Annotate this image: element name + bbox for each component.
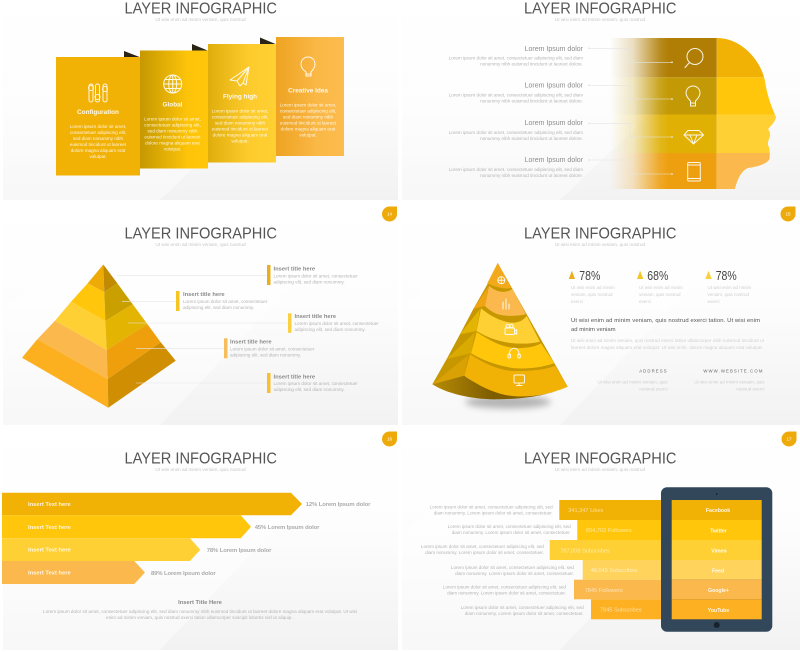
card: configuration: consectetuer adipiscing elit, [70,130,126,135]
stat 1: veniam, quis nostrud [571,292,613,297]
callout 1: adipiscing elit, sed diam nonummy. [274,280,345,284]
row 2 bar: 654,702 Followers [586,528,632,534]
callout 2: Lorem ipsum dolor sit amet, consectetuer [183,299,268,304]
card: creative idea: sed diam nonummy nibh [283,114,333,120]
item 3: diamond: nonummy nibh euismod tincidunt ut laoreet dolore. [480,136,583,141]
callout 4: Insert title here [230,340,272,346]
website: Ut wisi enim ad minim veniam, quis [694,380,765,384]
card: creative idea [260,37,344,156]
callout 1 [267,265,358,285]
arrow 1: 12% Lorem Ipsum dolor [306,502,371,508]
card: configuration: Lorem ipsum dolor sit amet, [70,124,126,129]
row 6 bar [461,599,661,619]
page number [382,206,397,222]
row 2 bar: Lorem ipsum dolor sit amet, consectetuer adipiscing elit, sed [448,524,571,529]
card: global: dolore magna aliquam erat [145,140,201,146]
insert title text block: Insert Title Here [178,600,223,606]
item 2: bulb: Lorem Ipsum dolor [525,82,584,90]
stat 3: exerci [708,299,720,304]
panel: tablet slide [402,428,800,650]
row 1 bar: 341,347 Likes [568,508,603,514]
item 2: bulb [449,82,700,106]
card: flying high: Flying high [223,94,257,100]
address: ADDRESS [639,368,668,374]
callout 3: Lorem ipsum dolor sit amet, consectetuer [294,321,379,326]
card: creative idea: consectetuer adipiscing elit, [280,108,336,114]
callout 4: adipiscing elit, sed diam nonummy. [230,352,301,358]
arrow 1: Insert Text here [28,502,72,508]
card: creative idea: volutpat. [299,132,317,138]
card: configuration: Configuration [77,109,119,116]
stat 3: Ut wisi enim ad minim [708,285,752,290]
website: nostrud exerci [736,386,764,392]
subtitle: Ut wisi enim ad minim veniam, quis nostrud [155,242,246,247]
callout 3: Insert title here [294,314,337,320]
title: LAYER INFOGRAPHIC [124,0,277,18]
text block body: Ut wisi enim ad minim veniam, quis nostrud exerci tation ullamcorper nibh euismod tincidunt ut [571,338,765,343]
panel: 3D cone slide [402,203,800,425]
stat 1: exerci [571,299,583,304]
callout 3 [288,313,379,333]
tier 1 [487,263,512,289]
tablet: Google+ [708,588,729,594]
card: global: consectetuer adipiscing elit, [144,122,201,128]
arrow 3: 78% Lorem Ipsum dolor [207,548,272,554]
callout 5: adipiscing elit, sed diam nonummy. [274,387,345,392]
head silhouette with colour bands [610,38,787,189]
card: configuration: euismod tincidunt ut laoreet [70,142,127,147]
tier 2 [473,287,488,309]
card: global: euismod tincidunt ut laoreet [144,134,201,140]
insert title text block: Lorem ipsum dolor sit amet, consectetuer adipiscing elit, sed diam nonummy nibh euismod tincidunt ut laoreet dolore magna aliquam erat volutpat. Ut wisi [43,609,357,614]
card: flying high [192,44,276,162]
item 1: search [449,46,703,68]
item 2: bulb: nonummy nibh euismod tincidunt ut laoreet dolore. [480,98,583,104]
page number [782,432,796,447]
row 3 bar: 787,009 Subscribes [560,548,610,554]
subtitle: Ut wisi enim ad minim veniam, quis nostrud [555,17,645,22]
arrow 2: 45% Lorem Ipsum dolor [255,525,320,531]
address [597,368,668,392]
row 4 bar: diam nonummy. Lorem ipsum dolor sit amet, consectetuer. [455,571,574,576]
tier 5 [432,355,468,384]
arrow 3 [2,538,272,561]
page number: 16 [387,436,392,442]
item 4: tablet: nonummy nibh euismod tincidunt ut laoreet dolore. [480,173,583,178]
cone chart [432,263,568,408]
item 1: search: nonummy nibh euismod tincidunt ut laoreet dolore. [480,62,583,66]
arrow 4 [2,561,216,584]
row 6 bar: Lorem ipsum dolor sit amet, consectetuer adipiscing elit, sed [461,605,584,610]
stat 1: 78% [579,269,600,283]
page number [781,206,796,222]
row 5 bar: diam nonummy. Lorem ipsum dolor sit amet, consectetuer. [447,590,566,596]
stat 1 [569,269,615,304]
tablet: YouTube [708,608,729,614]
tier icons [498,277,505,284]
tier 4 [447,332,475,359]
stat 3 [705,269,752,304]
stat 2: Ut wisi enim ad minim [639,285,683,290]
card: configuration: dolore magna aliquam erat [71,148,126,153]
stat 2: veniam, quis nostrud [639,292,681,297]
item 3: diamond: Lorem ipsum dolor sit amet, consectetuer adipiscing elit, sed diam [449,130,583,135]
page number: 14 [387,212,392,216]
card: flying high: euismod tincidunt ut laoreet [212,126,269,132]
subtitle: Ut wisi enim ad minim veniam, quis nostrud [155,17,246,22]
item 4: tablet: Lorem ipsum dolor sit amet, consectetuer adipiscing elit, sed diam [449,167,583,172]
row 4 bar: Lorem ipsum dolor sit amet, consectetuer adipiscing elit, sed [451,565,574,570]
callout 3: adipiscing elit, sed diam nonummy. [294,327,366,332]
item 1: search: Lorem ipsum dolor sit amet, consectetuer adipiscing elit, sed diam [449,56,583,60]
row 5 bar: 7845 Followers [585,588,623,594]
title: LAYER INFOGRAPHIC [524,226,676,242]
tablet [661,487,772,632]
row 3 bar [421,540,662,560]
card: configuration [56,57,140,176]
cone base silhouette [432,263,568,392]
title: LAYER INFOGRAPHIC [524,450,676,468]
pyramid chart [22,264,176,408]
leader lines [117,275,288,383]
stat 1: Ut wisi enim ad minim [571,285,615,290]
tablet: Feed [712,568,724,574]
card: flying high: dolore magna aliquam erat [213,132,268,138]
text block heading: Ut wisi enim ad minim veniam, quis nostrud exerci tation. Ut wisi enim [571,318,760,324]
row 2 bar: diam nonummy. Lorem ipsum dolor sit amet, consectetuer. [452,530,571,535]
card: global: Lorem ipsum dolor sit amet, [144,116,201,122]
arrow 1 [2,493,371,515]
card: configuration: sed diam nonummy nibh [73,136,123,141]
row 1 bar [430,500,661,520]
card: global: sed diam nonummy nibh [147,128,198,134]
insert title text block [43,600,357,620]
row 1 bar: Lorem ipsum dolor sit amet, consectetuer adipiscing elit, sed [430,504,553,510]
panel: configuration cards slide [3,0,398,200]
title: LAYER INFOGRAPHIC [124,226,277,242]
text block body [571,338,765,350]
panel: arrows slide [2,428,398,650]
address: Ut wisi enim ad minim veniam, quis [597,380,668,384]
callout 5 [267,373,358,393]
item 2: bulb: Lorem ipsum dolor sit amet, consectetuer adipiscing elit, sed diam [449,92,583,98]
row 5 bar: Lorem ipsum dolor sit amet, consectetuer adipiscing elit, sed [443,584,566,590]
panel: layered pyramid slide [3,203,398,425]
text block heading [571,318,760,333]
callout 4 [224,338,315,358]
arrow 2: Insert Text here [28,525,72,531]
arrow 2 [2,515,320,538]
callout 2: adipiscing elit, sed diam nonummy. [183,305,254,310]
stat 3: veniam, quis nostrud [708,292,750,297]
item 1: search: Lorem Ipsum dolor [525,46,584,53]
insert title text block: enim ad minim veniam, quis nostrud exerci tation ullamcorper suscipit lobortis nisl ut aliquip . [106,615,294,620]
row 2 bar [448,520,661,540]
item 3: diamond: Lorem Ipsum dolor [525,120,584,127]
stat 3: 78% [716,269,737,283]
card: flying high: Lorem ipsum dolor sit amet, [212,108,268,114]
card: creative idea: euismod tincidunt ut laoreet [280,120,337,126]
website: WWW.WEBSITE.COM [703,368,764,374]
tablet: Twitter [710,528,727,534]
website [694,368,765,392]
text block heading: ad minim veniam [571,327,616,333]
row 1 bar: diam nonummy. Lorem ipsum dolor sit amet, consectetuer. [434,510,553,516]
title: LAYER INFOGRAPHIC [124,450,277,468]
page number: 15 [785,212,791,216]
card: flying high: consectetuer adipiscing elit, [212,114,268,120]
page number [382,432,397,447]
row 4 bar [451,560,662,580]
subtitle: Ut wisi enim ad minim veniam, quis nostrud [555,242,645,247]
callout 4: Lorem ipsum dolor sit amet, consectetuer [230,346,315,352]
callout 5: Insert title here [274,374,316,380]
arrow 4: 89% Lorem Ipsum dolor [151,571,216,577]
row 3 bar: diam nonummy. Lorem ipsum dolor sit amet, consectetuer. [425,550,544,555]
row 6 bar: 7845 Subscribes [600,608,642,614]
card: creative idea: dolore magna aliquam erat [281,126,336,132]
arrow 4: Insert Text here [28,571,72,577]
page number: 17 [786,436,792,442]
item 4: tablet [449,157,700,181]
panel: head layers slide [449,2,800,200]
card: global: Global [163,102,183,108]
text block body: laoreet dolore magna aliquam erat volutpat. Ut wisi enim. dolore magna aliquam erat volutpat. [571,345,763,350]
callout 1: Lorem ipsum dolor sit amet, consectetuer [274,274,358,278]
card: creative idea: Creative Idea [288,88,328,94]
row 3 bar: Lorem ipsum dolor sit amet, consectetuer adipiscing elit, sed [421,544,544,549]
title: LAYER INFOGRAPHIC [524,0,676,18]
card: global [124,50,208,168]
tablet: Vimeo [711,548,727,554]
card: flying high: volutpat. [231,138,249,144]
row 4 bar: 46,045 Subscribes [591,568,637,574]
card: configuration: volutpat. [89,154,107,159]
tablet: Facebook [706,508,730,514]
stat 2: exerci [639,299,651,304]
address: nostrud exerci [639,386,668,392]
subtitle: Ut wisi enim ad minim veniam, quis nostrud [155,467,246,472]
stat 2: 68% [647,269,668,283]
callout 2: Insert title here [183,292,225,298]
card: flying high: sed diam nonummy nibh [215,120,265,126]
card: creative idea: Lorem ipsum dolor sit amet, [280,102,336,108]
row 5 bar [443,580,661,599]
arrow 3: Insert Text here [28,548,72,554]
card: global: volutpat. [164,146,181,152]
callout 2 [176,291,268,311]
stat 2 [637,269,683,304]
subtitle: Ut wisi enim ad minim veniam, quis nostrud [555,467,645,472]
item 4: tablet: Lorem Ipsum dolor [525,157,584,164]
row 6 bar: diam nonummy. Lorem ipsum dolor sit amet, consectetuer. [465,611,584,616]
item 3: diamond [449,120,704,144]
callout 1: Insert title here [274,266,316,272]
callout 5: Lorem ipsum dolor sit amet, consectetuer [274,381,358,386]
tier 3 [460,309,480,334]
